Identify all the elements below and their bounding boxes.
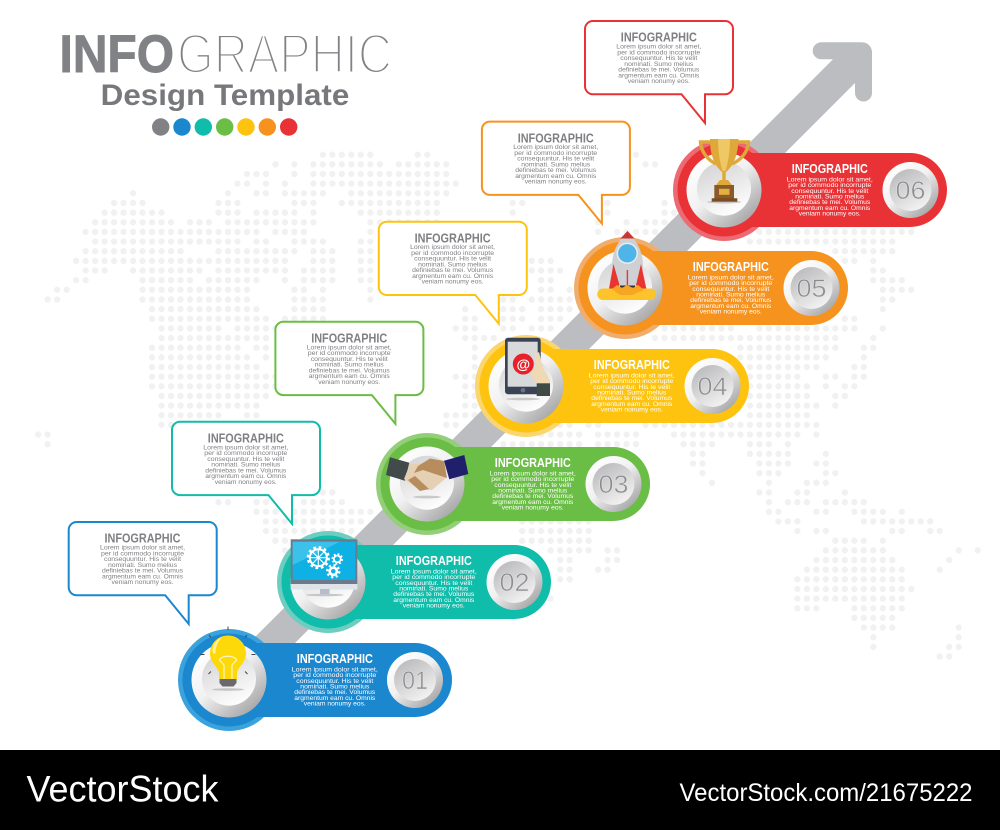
callout 4: yellow: consequuntur. His te velit <box>414 256 491 263</box>
callout 6: red: Lorem ipsum dolor sit amet, <box>616 44 702 50</box>
callout 2: teal: definiebas te mei. Volumus <box>205 467 286 474</box>
callout 2: teal <box>172 422 320 524</box>
callout 1: blue: Lorem ipsum dolor sit amet, <box>100 544 185 552</box>
callout 5: orange: definiebas te mei. Volumus <box>515 167 596 174</box>
callout 6: red: INFOGRAPHIC <box>621 31 697 45</box>
panel: step 02 teal: argmentum eam cu. Omnis <box>393 597 474 604</box>
title: INFOGRAPHIC Design Template: INFO <box>60 25 174 84</box>
panel: step 06 red: INFOGRAPHIC <box>792 162 868 176</box>
panel: step 01 blue: argmentum eam cu. Omnis <box>294 695 375 702</box>
callout 3: green: INFOGRAPHIC <box>311 331 387 345</box>
panel: step 05 orange: nominati. Sumo melius <box>696 292 765 298</box>
callout 1: blue: INFOGRAPHIC <box>104 532 180 546</box>
panel: step 06 red: definiebas te mei. Volumus <box>789 199 870 206</box>
callout 5: orange <box>482 122 630 224</box>
panel: step 05 orange <box>574 237 848 339</box>
panel: step 02 teal: per id commodo incorrupte <box>392 574 476 581</box>
callout 2: teal: veniam nonumy eos. <box>215 479 277 486</box>
callout 4: yellow: nominati. Sumo melius <box>418 261 487 268</box>
panel: step 04 yellow: definiebas te mei. Volumus <box>591 395 672 402</box>
panel: step 05 orange: per id commodo incorrupte <box>689 280 773 287</box>
panel: step 06 red: 06 <box>896 177 926 205</box>
colour dots row <box>152 118 297 136</box>
panel: step 01 blue: INFOGRAPHIC <box>297 652 373 666</box>
callout 4: yellow: veniam nonumy eos. <box>422 279 484 286</box>
panel: step 01 blue <box>178 629 452 731</box>
panel: step 03 green: per id commodo incorrupte <box>491 476 575 483</box>
panel: step 01 blue: veniam nonumy eos. <box>304 701 366 708</box>
background: dotted world map <box>38 155 978 656</box>
callout 5: orange: nominati. Sumo melius <box>521 161 590 168</box>
callout 1: blue: definiebas te mei. Volumus <box>102 568 183 574</box>
panel: step 05 orange: consequuntur. His te velit <box>692 286 770 293</box>
panel: step 02 teal: nominati. Sumo melius <box>399 586 468 592</box>
panel: step 02 teal: consequuntur. His te velit <box>395 580 473 587</box>
callout 5: orange: consequuntur. His te velit <box>517 156 595 163</box>
footer: black watermark band: VectorStock.com/21675222 <box>680 779 972 807</box>
callout 3: green <box>275 322 423 424</box>
callout 5: orange: per id commodo incorrupte <box>514 150 598 157</box>
panel: step 05 orange: INFOGRAPHIC <box>693 260 769 274</box>
panel: step 01 blue: nominati. Sumo melius <box>300 684 369 690</box>
panel: step 05 orange: 05 <box>796 275 826 303</box>
panel: step 04 yellow: INFOGRAPHIC <box>594 358 670 372</box>
panel: step 03 green: Lorem ipsum dolor sit amet, <box>490 470 576 477</box>
callout 2: teal: Lorem ipsum dolor sit amet, <box>203 444 289 451</box>
callout 5: orange: Lorem ipsum dolor sit amet, <box>513 144 599 151</box>
panel: step 03 green: 03 <box>598 471 628 499</box>
arrow: grey rising diagonal <box>200 42 872 698</box>
panel: step 03 green: veniam nonumy eos. <box>502 505 564 512</box>
footer: black watermark band <box>0 750 1000 830</box>
footer: black watermark band: VectorStock <box>26 768 219 810</box>
panel: step 04 yellow: Lorem ipsum dolor sit amet, <box>589 372 675 379</box>
panel: step 05 orange: Lorem ipsum dolor sit amet, <box>688 274 774 281</box>
callout 6: red: definiebas te mei. Volumus <box>618 66 699 74</box>
panel: step 03 green: INFOGRAPHIC <box>495 456 571 470</box>
panel: step 01 blue: consequuntur. His te velit <box>296 678 374 685</box>
panel: step 05 orange: veniam nonumy eos. <box>700 309 762 316</box>
icon: handshake <box>386 455 468 498</box>
panel: step 04 yellow: per id commodo incorrupte <box>590 378 674 385</box>
panel: step 06 red: argmentum eam cu. Omnis <box>789 205 870 212</box>
panel: step 01 blue: Lorem ipsum dolor sit amet, <box>292 666 378 673</box>
callout 3: green: veniam nonumy eos. <box>318 379 381 386</box>
callout 6: red: per id commodo incorrupte <box>617 49 701 56</box>
panel: step 01 blue: 01 <box>402 667 428 695</box>
panel: step 01 blue: per id commodo incorrupte <box>293 672 377 679</box>
title: INFOGRAPHIC Design Template: Design Template <box>101 79 349 112</box>
icon: tablet with at sign and hand <box>505 338 550 400</box>
callout 3: green: nominati. Sumo melius <box>315 362 384 369</box>
callout 4: yellow: definiebas te mei. Volumus <box>412 267 493 274</box>
callout 4: yellow: INFOGRAPHIC <box>415 231 491 245</box>
icon: trophy <box>700 139 748 204</box>
callout 2: teal: argmentum eam cu. Omnis <box>205 473 286 480</box>
panel: step 04 yellow: veniam nonumy eos. <box>601 407 663 414</box>
panel: step 02 teal: Lorem ipsum dolor sit amet, <box>391 568 477 575</box>
panel: step 06 red: per id commodo incorrupte <box>788 182 872 189</box>
panel: step 06 red: consequuntur. His te velit <box>791 188 869 195</box>
icon: rocket <box>597 231 656 300</box>
panel: step 05 orange: argmentum eam cu. Omnis <box>690 303 771 310</box>
callout 1: blue: argmentum eam cu. Omnis <box>102 573 183 580</box>
icon: monitor with gears <box>291 539 357 596</box>
callout 5: orange: INFOGRAPHIC <box>518 131 594 145</box>
title: INFOGRAPHIC Design Template <box>60 22 392 112</box>
panel: step 02 teal: 02 <box>500 569 530 597</box>
callout 4: yellow: Lorem ipsum dolor sit amet, <box>410 244 495 251</box>
panel: step 03 green <box>376 433 650 535</box>
callout 4: yellow: per id commodo incorrupte <box>411 250 495 257</box>
panel: step 04 yellow: consequuntur. His te velit <box>593 384 671 391</box>
callout 4: yellow: argmentum eam cu. Omnis <box>412 273 493 280</box>
panel: step 03 green: definiebas te mei. Volumus <box>492 493 573 500</box>
panel: step 06 red: veniam nonumy eos. <box>799 211 861 218</box>
callout 4: yellow <box>379 222 527 324</box>
callout 6: red: argmentum eam cu. Omnis <box>618 72 699 79</box>
callout 2: teal: per id commodo incorrupte <box>204 450 288 457</box>
panel: step 02 teal <box>277 531 551 633</box>
callout 3: green: consequuntur. His te velit <box>311 356 388 363</box>
callout 6: red: nominati. Sumo melius <box>624 61 693 68</box>
callout 1: blue: veniam nonumy eos. <box>112 579 174 586</box>
callout 6: red: consequuntur. His te velit <box>620 55 698 62</box>
panel: step 05 orange: definiebas te mei. Volumus <box>690 297 771 304</box>
panel: step 03 green: nominati. Sumo melius <box>498 488 567 494</box>
panel: step 01 blue: definiebas te mei. Volumus <box>294 689 375 696</box>
panel: step 06 red: Lorem ipsum dolor sit amet, <box>787 176 873 183</box>
callout 6: red <box>585 21 733 123</box>
panel: step 02 teal: INFOGRAPHIC <box>396 554 472 568</box>
panel: step 03 green: consequuntur. His te velit <box>494 482 572 489</box>
panel: step 04 yellow <box>475 335 749 437</box>
panel: step 04 yellow: nominati. Sumo melius <box>597 390 666 396</box>
panel: step 06 red: nominati. Sumo melius <box>795 194 864 200</box>
callout 1: blue <box>69 522 217 624</box>
callout 2: teal: INFOGRAPHIC <box>208 431 284 445</box>
panel: step 03 green: argmentum eam cu. Omnis <box>492 499 573 506</box>
panel: step 04 yellow: argmentum eam cu. Omnis <box>591 401 672 408</box>
callout 1: blue: consequuntur. His te velit <box>104 556 181 563</box>
panel: step 02 teal: veniam nonumy eos. <box>403 603 465 610</box>
icon: tablet with at sign and hand: @ <box>516 356 530 372</box>
callout 3: green: argmentum eam cu. Omnis <box>309 373 390 380</box>
callout 3: green: definiebas te mei. Volumus <box>309 367 390 374</box>
callout 1: blue: per id commodo incorrupte <box>101 550 185 557</box>
panel: step 02 teal: definiebas te mei. Volumus <box>393 591 474 598</box>
callout 2: teal: nominati. Sumo melius <box>211 462 280 469</box>
callout 1: blue: nominati. Sumo melius <box>108 562 177 569</box>
callout 3: green: per id commodo incorrupte <box>308 350 391 357</box>
panel: step 06 red <box>673 139 947 241</box>
callout 5: orange: argmentum eam cu. Omnis <box>515 173 596 180</box>
callout 6: red: veniam nonumy eos. <box>628 78 690 85</box>
panel: step 04 yellow: 04 <box>698 373 728 401</box>
callout 3: green: Lorem ipsum dolor sit amet, <box>307 344 392 351</box>
title: INFOGRAPHIC Design Template: GRAPHIC <box>177 22 392 85</box>
callout 2: teal: consequuntur. His te velit <box>207 456 285 463</box>
callout 5: orange: veniam nonumy eos. <box>525 179 587 186</box>
icon: light bulb <box>200 626 256 691</box>
